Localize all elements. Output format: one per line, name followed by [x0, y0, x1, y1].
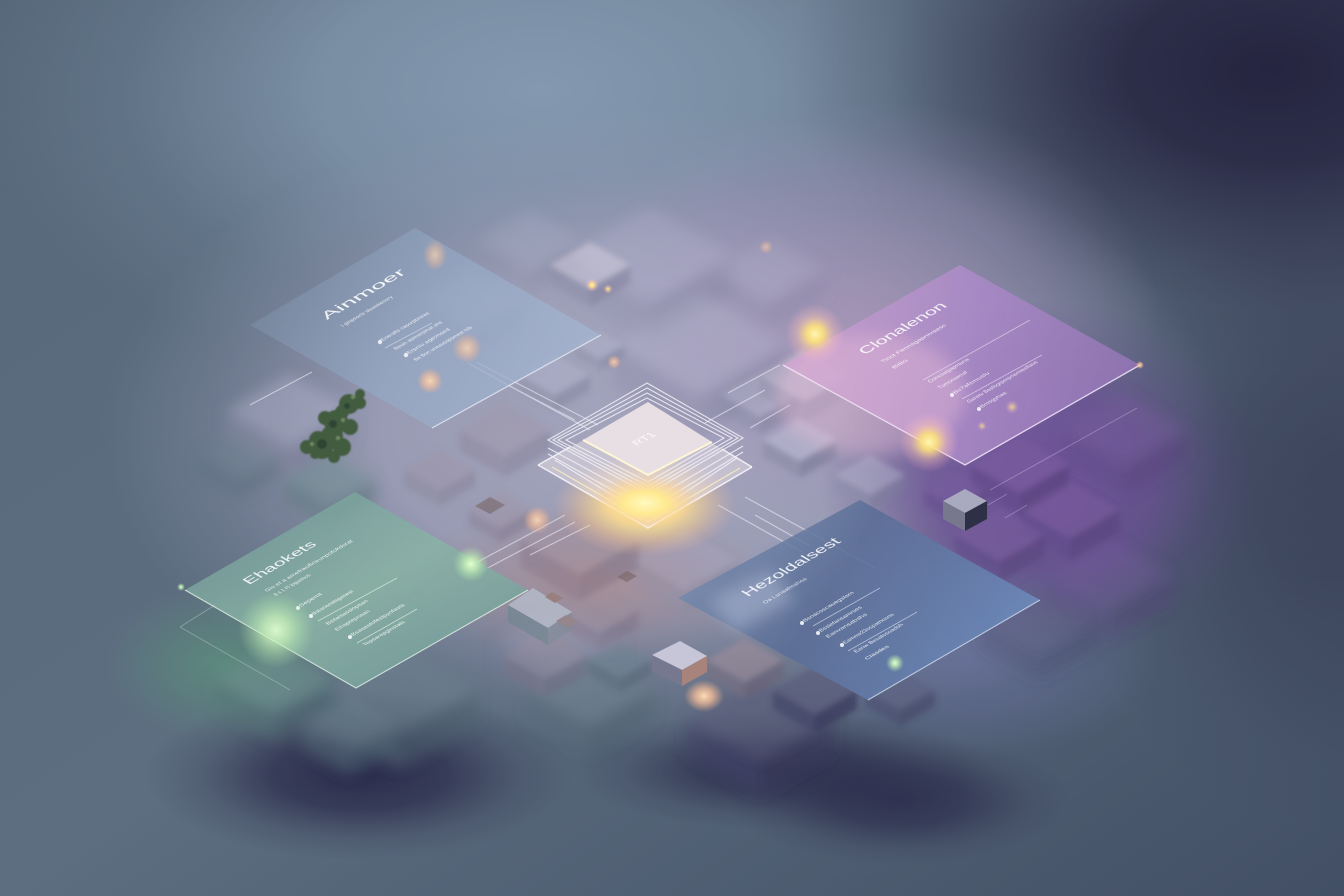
list: Tepsarepginstats — [362, 620, 408, 647]
panel: bottom-left green card: 8 s 1 Fl Ipgastsos — [273, 573, 313, 597]
list: Bsitaisasslopsan — [325, 599, 370, 626]
list: Tumonsenaf — [937, 370, 970, 390]
panel edges — [185, 590, 528, 688]
bullet list — [378, 311, 475, 362]
chip top face — [583, 402, 712, 475]
subtitle: Tinct Fennsgapnivaasc — [880, 323, 949, 364]
central chip — [538, 383, 752, 557]
small solid cube, right of centre — [943, 489, 987, 531]
title: Ainmoer — [317, 266, 410, 322]
list — [296, 589, 408, 647]
panel: top-right purple card — [775, 265, 1140, 518]
list — [927, 358, 1040, 411]
list: Bs7afzmuslu — [952, 371, 992, 395]
list: Eihsptepnsan — [334, 609, 372, 632]
chip label: RT1 — [630, 431, 660, 447]
subtitle: Gis et a amefrasifirieunpofokdsrat — [264, 539, 356, 593]
dividers — [318, 578, 417, 643]
subtitle: I ginpsorts sluaskenory — [340, 295, 395, 328]
panel: top-left glass card — [250, 228, 601, 428]
small white block, lower centre — [652, 641, 707, 686]
list: Eanw Besatssoadsh — [853, 623, 906, 654]
subtitle: Oa Lsnaafmshos — [762, 577, 809, 605]
isometric block field: front — [405, 242, 1119, 733]
panel pink glow — [775, 335, 965, 455]
list: Ganetv Besfogrperpmsmiesftaus — [966, 360, 1040, 404]
chip under-glow — [553, 453, 737, 557]
list: Sepemt — [298, 592, 325, 608]
list: Bsasastofeslpyofasts — [350, 603, 407, 637]
panel: top-right purple card: Bilio — [891, 358, 910, 370]
title: Ehaokets — [239, 538, 321, 587]
list: Eamnw23sspatnosns — [842, 613, 897, 645]
bullet list: Eneralts casorpbneas — [380, 311, 432, 342]
list: Concsatgapmuna — [927, 358, 971, 384]
list: Clasdes — [864, 644, 892, 661]
list: Bmsgyhas — [979, 391, 1009, 409]
bullet list: Erpniu agevnsed — [406, 328, 452, 355]
list: Bssiefansamrses — [818, 605, 865, 633]
panel glow spots — [417, 239, 482, 394]
panel: bottom-right blue card — [678, 500, 1040, 700]
isometric block field: back — [198, 207, 1188, 796]
list — [800, 591, 906, 661]
dividers — [813, 588, 917, 651]
list: Bstanaoatsgasest — [311, 589, 356, 616]
chip base — [538, 405, 752, 528]
lower ghost lines — [988, 408, 1137, 518]
glowing orbs — [177, 240, 1144, 712]
list: Eanvansabshs — [825, 612, 870, 639]
chip yellow core — [590, 475, 700, 531]
bullet list: Ba Bon uneausopsmeat tsls — [413, 325, 475, 362]
list: Bsnacoscauegstsrn — [802, 591, 856, 623]
title: Clonalenon — [855, 300, 950, 357]
bullet list: Beuin astmerpinat ans — [393, 320, 445, 351]
panel lit corner — [710, 570, 795, 632]
panel: bottom-left green card — [180, 492, 528, 690]
panel edges — [868, 600, 1040, 700]
chip ring layers — [548, 383, 743, 517]
divider — [385, 323, 432, 348]
title: Hezoldalsest — [738, 536, 844, 599]
panel edge — [432, 335, 601, 428]
rubble blocks by green panel — [475, 497, 637, 645]
dividers — [923, 320, 1042, 399]
tree — [300, 389, 366, 463]
panel edges — [783, 365, 1140, 465]
connector wires — [250, 362, 875, 572]
drop shadows below the structure — [145, 690, 1070, 865]
chip lit edge — [583, 440, 712, 475]
